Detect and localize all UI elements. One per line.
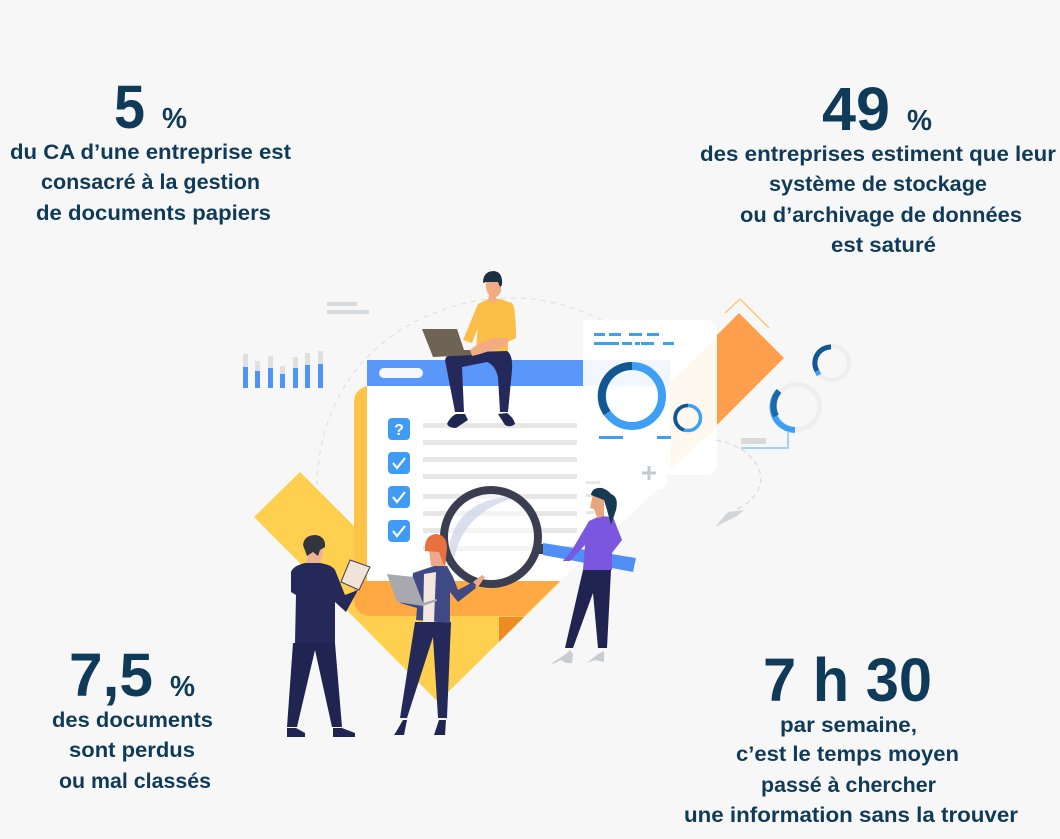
mini bar chart xyxy=(243,351,323,388)
blue ruler xyxy=(543,543,636,572)
plus sign xyxy=(642,466,656,480)
orange diamond xyxy=(717,313,784,425)
statistic: 7 h 30 xyxy=(684,646,1018,827)
statistic: 7,5 %: des documents xyxy=(52,709,213,732)
connector and label xyxy=(741,431,788,448)
statistic: 5 %: de documents papiers xyxy=(36,202,271,225)
statistic: 49 %: est saturé xyxy=(831,234,936,257)
magnifying glass xyxy=(444,490,544,584)
statistic: 7,5 %: ou mal classés xyxy=(59,770,211,793)
small ring chart xyxy=(675,405,700,430)
statistic: 5 %: du CA d’une entreprise est xyxy=(10,141,291,164)
icon: grey label lines xyxy=(327,302,369,314)
icon: paper plane xyxy=(715,510,744,527)
person: woman with laptop xyxy=(387,534,485,735)
yellow diamond background xyxy=(254,472,560,702)
statistic: 49 %: ou d’archivage de données xyxy=(740,204,1022,227)
person: man sitting with laptop xyxy=(422,271,516,428)
question and check icons: ? xyxy=(394,422,404,439)
question and check icons xyxy=(388,418,410,542)
ring gauge large xyxy=(773,384,820,430)
statistic: 7 h 30: une information sans la trouver xyxy=(684,804,1018,827)
person: woman with ruler xyxy=(552,488,622,664)
statistic: 49 %: % xyxy=(907,105,932,137)
statistic: 49 %: système de stockage xyxy=(769,173,987,196)
ring gauge small xyxy=(815,346,849,380)
statistic: 7 h 30: c’est le temps moyen xyxy=(736,743,959,766)
statistic: 7,5 %: sont perdus xyxy=(69,739,195,762)
panel heading dashes xyxy=(594,333,674,439)
statistic: 7,5 %: 7,5 xyxy=(69,641,153,709)
statistic: 7 h 30: 7 h 30 xyxy=(763,646,932,714)
person: man with clipboard xyxy=(287,535,370,737)
document text lines xyxy=(423,423,600,551)
statistic: 7,5 %: % xyxy=(170,671,195,703)
donut chart xyxy=(602,366,662,426)
dashed flight path xyxy=(716,440,761,510)
statistic: 5 % xyxy=(10,73,291,225)
statistic: 5 %: 5 xyxy=(114,73,145,141)
main document panel xyxy=(367,320,717,581)
orange document shadow xyxy=(354,386,560,642)
statistic: 5 %: consacré à la gestion xyxy=(41,171,260,194)
central illustration xyxy=(243,271,849,737)
statistic: 49 %: des entreprises estiment que leur xyxy=(700,143,1056,166)
statistic: 49 % xyxy=(700,75,1056,257)
chevron above diamond xyxy=(725,299,769,328)
statistic: 5 %: % xyxy=(162,103,187,135)
statistic: 7 h 30: par semaine, xyxy=(780,714,917,737)
statistic: 7,5 % xyxy=(52,641,213,793)
statistic: 7 h 30: passé à chercher xyxy=(761,774,936,797)
statistic: 49 %: 49 xyxy=(822,75,890,143)
dashed arc behind the document xyxy=(317,298,605,485)
